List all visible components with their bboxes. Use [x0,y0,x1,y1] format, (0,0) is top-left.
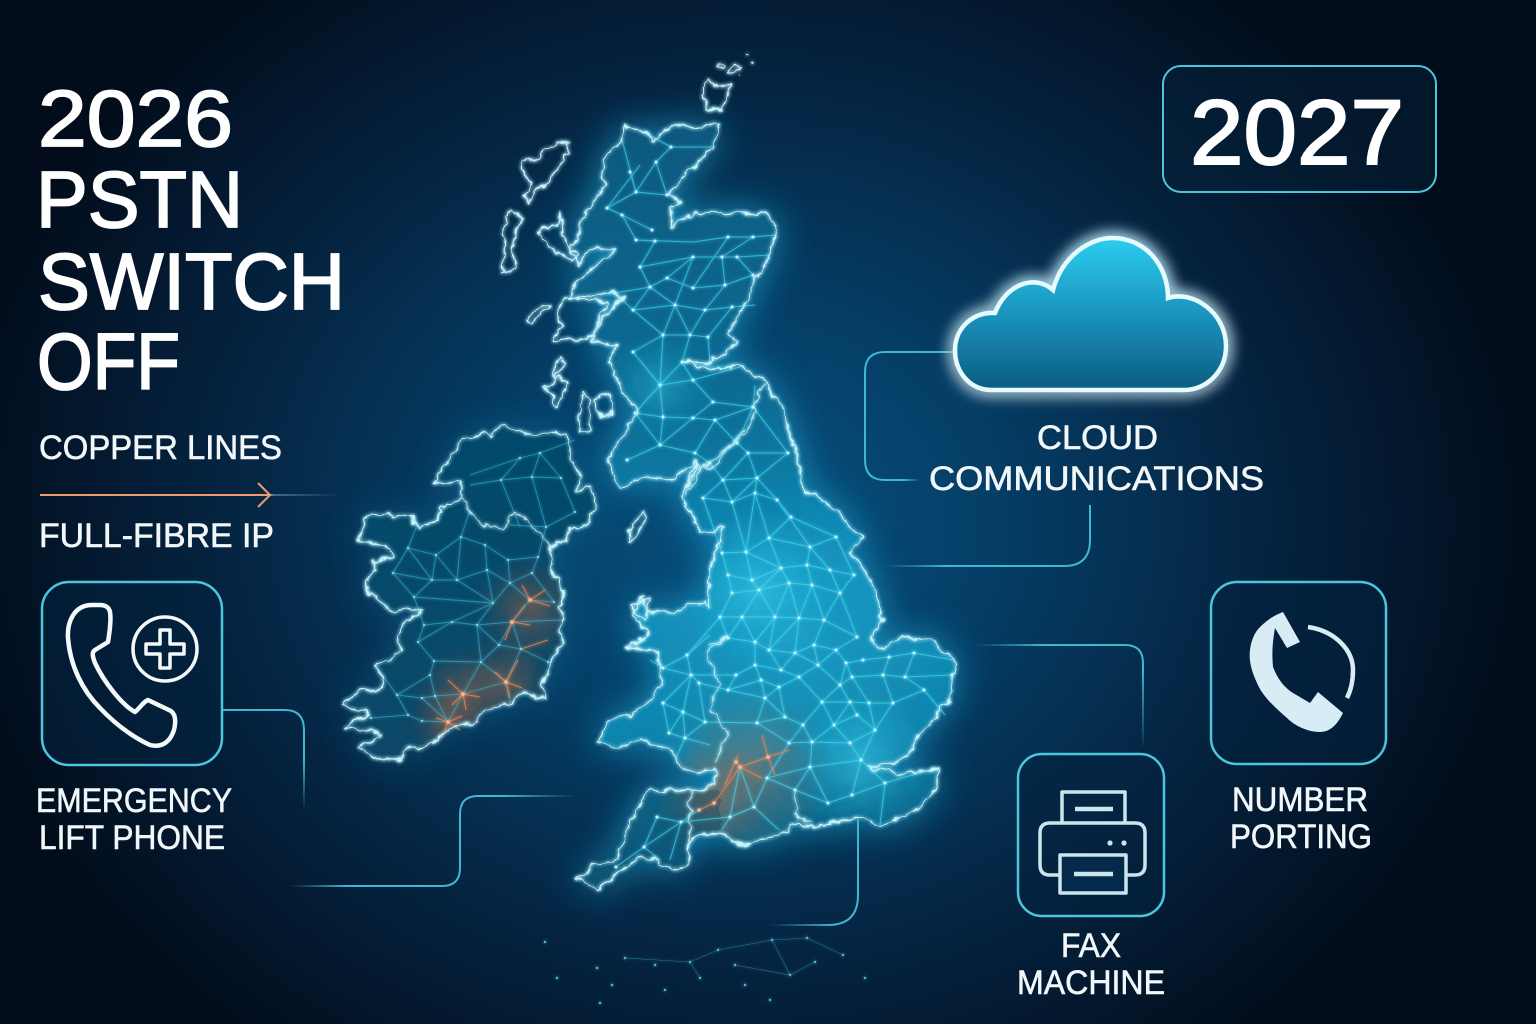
connector: south coast link [770,820,858,925]
label: emergency lift phone: LIFT PHONE [39,819,225,857]
map: network nodes [607,147,952,867]
title: 2026 [38,74,233,163]
map: Isle of Man and Anglesey [628,510,650,620]
label: cloud communications: CLOUD [1037,419,1158,457]
label: fax machine: MACHINE [1017,964,1165,1002]
label: number porting [1230,781,1372,856]
icon: phone with plus [68,605,197,746]
label: emergency lift phone [36,782,232,857]
year box: 2027 [1163,66,1436,192]
label: copper lines: COPPER LINES [39,429,282,467]
map: scattered offshore dots [545,938,865,1003]
map: network links across Great Britain [607,130,954,867]
map: Hebrides and Scottish islands [502,140,613,430]
title: SWITCH [38,237,345,326]
label: number porting: PORTING [1230,818,1372,856]
connector: lower left link [290,796,575,886]
icon box [1211,582,1386,764]
connector: cloud to label [865,352,955,480]
map: Great Britain landmass [567,125,970,890]
map: Orkney and Shetland [700,55,751,110]
title: PSTN [36,155,243,244]
UK and Ireland network map [342,55,970,1003]
icon: handset with arc [1250,612,1353,732]
year box: 2027: 2027 [1190,82,1404,184]
label: full-fibre IP: FULL-FIBRE IP [39,517,274,555]
arrow: copper to fibre [40,483,340,507]
connector: emergency box to map [222,710,304,810]
label: cloud communications [929,419,1264,498]
label: fax machine: FAX [1061,927,1121,965]
map: orange hot-spot nodes [448,600,768,810]
icon: fax printer [1040,792,1145,893]
map: Ireland landmass [342,425,595,762]
icon: cloud [955,238,1226,390]
panel: emergency lift phone [36,582,232,857]
map: orange hot-spot links [436,585,789,810]
map: network links across Ireland [371,440,575,722]
label: cloud communications: COMMUNICATIONS [929,460,1264,498]
panel: number porting [1211,582,1386,856]
icon box [1018,754,1164,916]
title: OFF [37,317,180,406]
label: number porting: NUMBER [1232,781,1368,819]
title [36,74,345,406]
map: internal borders [463,383,810,840]
label: emergency lift phone: EMERGENCY [36,782,232,820]
map: coastline outlines [342,55,954,890]
label: fax machine [1017,927,1165,1002]
panel: fax machine [1017,754,1165,1002]
connector: cloud label to map [885,505,1090,566]
icon box [42,582,222,765]
connector: map to fax box [975,645,1143,745]
